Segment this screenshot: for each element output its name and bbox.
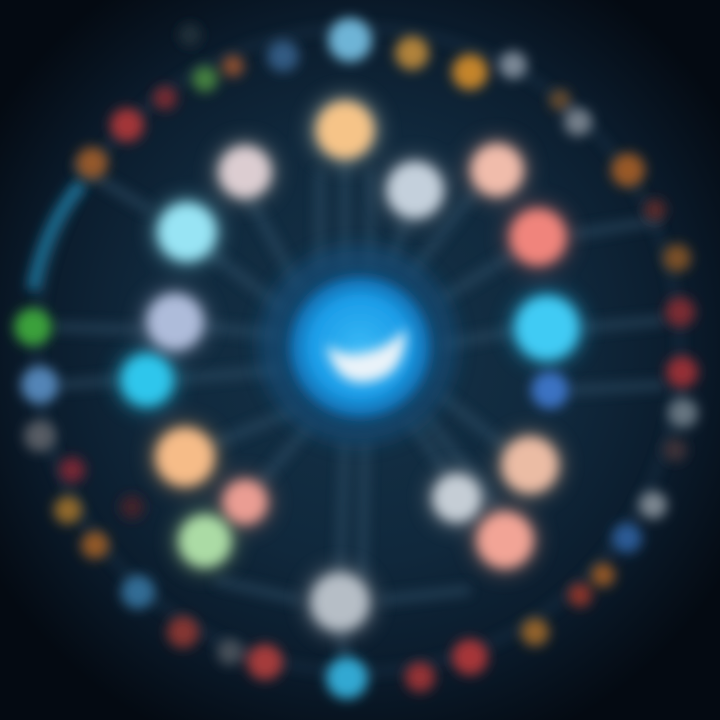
central hub bbox=[280, 267, 440, 427]
teal arc bbox=[33, 183, 82, 290]
central hub glow bbox=[258, 245, 458, 445]
icon: smile bbox=[326, 328, 406, 383]
inner node halos bbox=[113, 92, 587, 640]
hub disc bbox=[280, 267, 440, 427]
spokes bbox=[55, 150, 665, 660]
inner nodes bbox=[121, 101, 579, 631]
